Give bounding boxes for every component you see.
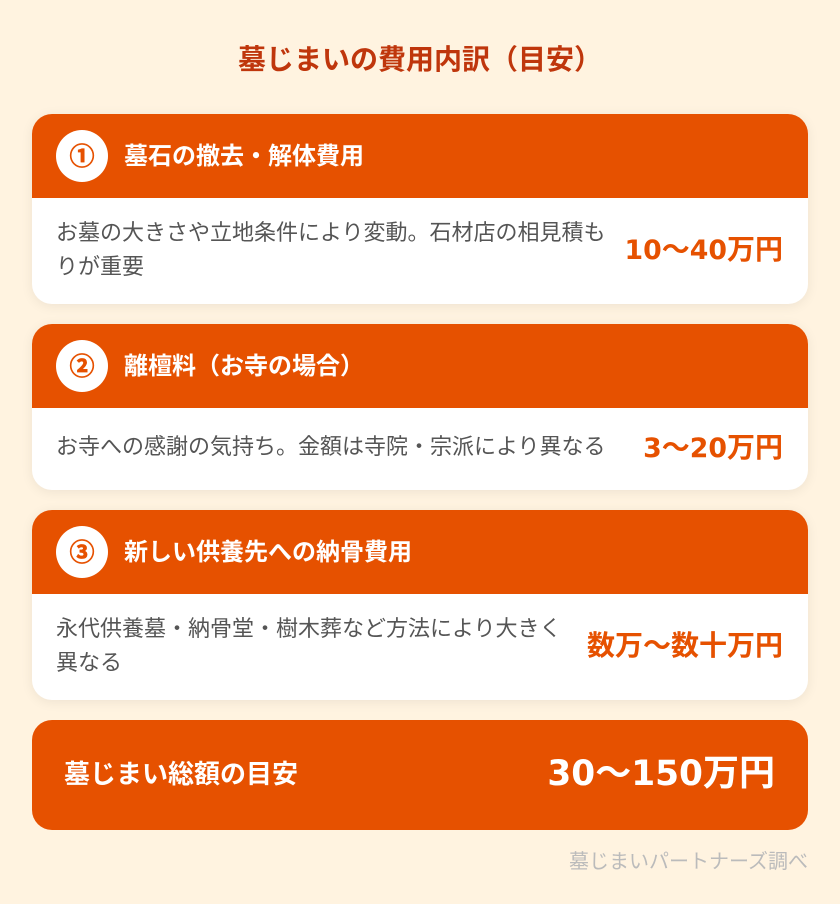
number badge 1: ① bbox=[69, 137, 94, 173]
price 1: 10〜40万円 bbox=[625, 228, 783, 268]
header band 3 bbox=[32, 510, 808, 594]
panel: item 1 gravestone removal bbox=[32, 114, 808, 304]
panel: item 2 temple leaving fee bbox=[32, 324, 808, 490]
price 3: 数万〜数十万円 bbox=[587, 624, 783, 664]
number badge 2 bbox=[56, 340, 108, 392]
header band 1 bbox=[32, 114, 808, 198]
description 3: 異なる bbox=[56, 645, 122, 677]
description 1: お墓の大きさや立地条件により変動。石材店の相見積も bbox=[56, 215, 606, 247]
description 1 bbox=[56, 215, 606, 281]
heading 1: 墓石の撤去・解体費用 bbox=[124, 136, 364, 171]
header band 2 bbox=[32, 324, 808, 408]
total value: 30〜150万円 bbox=[547, 744, 775, 796]
panel: total estimate bbox=[32, 720, 808, 830]
description 2: お寺への感謝の気持ち。金額は寺院・宗派により異なる bbox=[56, 429, 606, 461]
heading 2: 離檀料（お寺の場合） bbox=[124, 346, 364, 381]
price 2: 3〜20万円 bbox=[643, 426, 783, 466]
description 1: りが重要 bbox=[56, 249, 144, 281]
number badge 1 bbox=[56, 130, 108, 182]
heading 3: 新しい供養先への納骨費用 bbox=[124, 532, 412, 567]
description 3 bbox=[56, 611, 562, 677]
panel: item 3 new interment cost bbox=[32, 510, 808, 700]
source note: 墓じまいパートナーズ調べ bbox=[569, 845, 808, 874]
number badge 3 bbox=[56, 526, 108, 578]
description 3: 永代供養墓・納骨堂・樹木葬など方法により大きく bbox=[56, 611, 562, 643]
total label: 墓じまい総額の目安 bbox=[64, 754, 298, 791]
number badge 2: ② bbox=[69, 347, 94, 383]
number badge 3: ③ bbox=[69, 533, 94, 569]
title: 墓じまいの費用内訳（目安） bbox=[238, 38, 602, 78]
